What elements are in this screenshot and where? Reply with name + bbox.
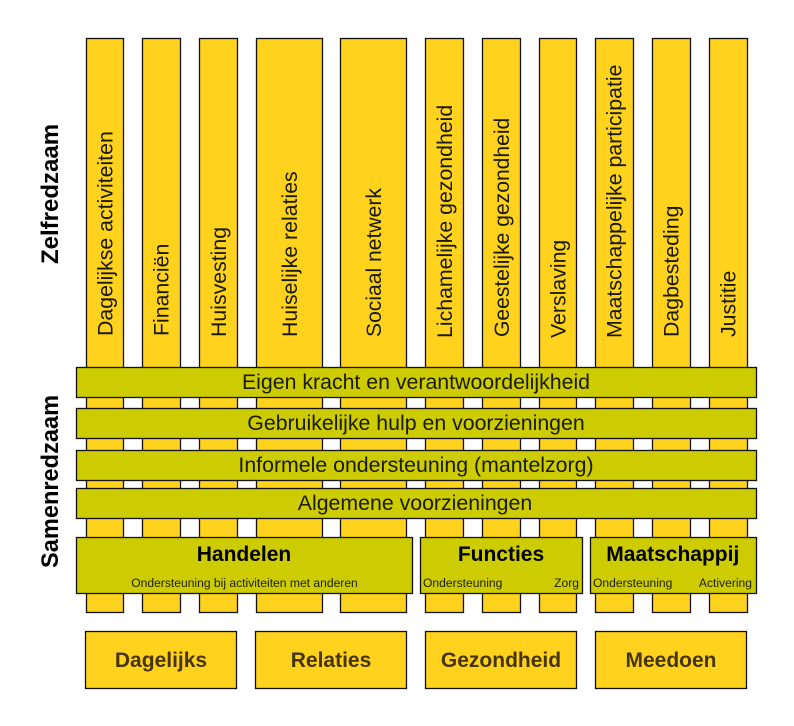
panel: Maatschappij: Activering xyxy=(699,576,752,590)
panel: Handelen: Ondersteuning bij activiteiten met anderen xyxy=(131,576,358,590)
box: Relaties: Relaties xyxy=(291,649,371,672)
band: Gebruikelijke hulp en voorzieningen xyxy=(76,408,756,438)
column: Dagbesteding: Dagbesteding xyxy=(660,206,684,337)
box: Gezondheid: Gezondheid xyxy=(441,649,561,672)
column: Dagbesteding xyxy=(652,38,690,612)
column: Justitie xyxy=(710,38,748,612)
column: Financiën: Financiën xyxy=(150,244,174,336)
column: Geestelijke gezondheid: Geestelijke gezondheid xyxy=(491,118,514,337)
heading: Samenredzaam: Samenredzaam xyxy=(38,395,64,568)
band: Gebruikelijke hulp en voorzieningen: Gebruikelijke hulp en voorzieningen xyxy=(247,411,585,435)
column: Lichamelijke gezondheid xyxy=(426,38,464,612)
column: Sociaal netwerk: Sociaal netwerk xyxy=(363,188,386,337)
panel: Handelen: Handelen xyxy=(197,543,291,566)
column: Huisvesting xyxy=(200,38,238,612)
column: Dagelijkse activiteiten xyxy=(86,38,124,612)
column: Verslaving: Verslaving xyxy=(546,240,570,338)
box: Dagelijks: Dagelijks xyxy=(115,649,207,672)
panel: Maatschappij: Maatschappij xyxy=(606,543,739,566)
column: Huiselijke relaties xyxy=(256,38,322,612)
box: Gezondheid xyxy=(426,632,576,688)
column: Verslaving xyxy=(540,38,576,612)
panel: Functies xyxy=(420,538,582,594)
panel: Functies: Zorg xyxy=(554,576,579,590)
column: Maatschappelijke participatie xyxy=(596,38,634,612)
panel: Maatschappij xyxy=(590,538,756,594)
column: Lichamelijke gezondheid: Lichamelijke gezondheid xyxy=(433,105,457,338)
panel: Functies: Functies xyxy=(458,543,544,566)
band: Informele ondersteuning (mantelzorg): Informele ondersteuning (mantelzorg) xyxy=(238,453,594,477)
box: Dagelijks xyxy=(86,632,236,688)
band: Eigen kracht en verantwoordelijkheid: Eigen kracht en verantwoordelijkheid xyxy=(242,370,590,394)
panel: Functies: Ondersteuning xyxy=(423,576,502,590)
column: Huisvesting: Huisvesting xyxy=(207,227,231,337)
panel: Handelen xyxy=(76,538,412,594)
column: Maatschappelijke participatie: Maatschappelijke participatie xyxy=(602,65,626,338)
column: Huiselijke relaties: Huiselijke relaties xyxy=(278,171,302,337)
band: Informele ondersteuning (mantelzorg) xyxy=(76,450,756,480)
column: Sociaal netwerk xyxy=(340,38,406,612)
column: Geestelijke gezondheid xyxy=(482,38,520,612)
heading: Zelfredzaam: Zelfredzaam xyxy=(37,124,64,264)
band: Eigen kracht en verantwoordelijkheid xyxy=(76,368,756,398)
band: Algemene voorzieningen xyxy=(76,488,756,518)
box: Relaties xyxy=(256,632,406,688)
column: Dagelijkse activiteiten: Dagelijkse activiteiten xyxy=(94,131,118,336)
panel: Maatschappij: Ondersteuning xyxy=(593,576,672,590)
column: Justitie: Justitie xyxy=(716,271,740,337)
box: Meedoen xyxy=(596,632,746,688)
band: Algemene voorzieningen: Algemene voorzieningen xyxy=(298,491,532,515)
column: Financiën xyxy=(142,38,180,612)
box: Meedoen: Meedoen xyxy=(625,649,717,672)
